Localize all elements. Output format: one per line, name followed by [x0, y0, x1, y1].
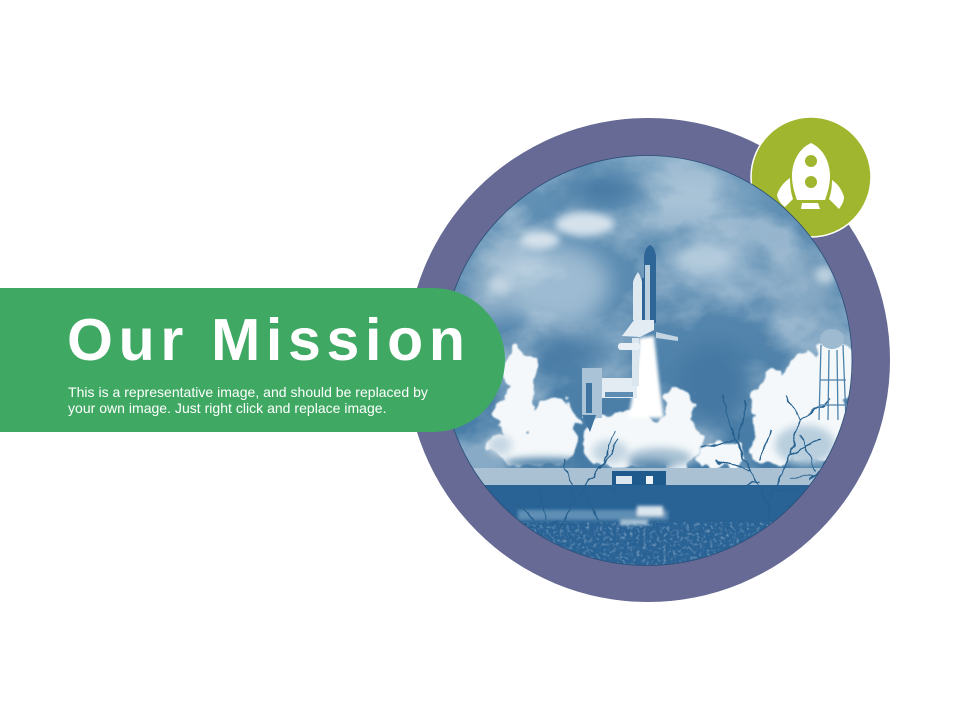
photo edge	[442, 156, 852, 566]
smoke shading	[488, 425, 835, 471]
left fin	[777, 178, 793, 207]
solid rocket booster	[633, 272, 642, 320]
orbiter wing	[622, 320, 654, 337]
water	[518, 506, 668, 525]
purple ring	[406, 118, 890, 602]
ground texture	[523, 522, 772, 566]
sky clouds	[468, 173, 835, 358]
heading: Our Mission	[67, 307, 471, 373]
description	[68, 384, 428, 416]
exhaust smoke	[486, 340, 860, 470]
description: your own image. Just right click and replace image.	[68, 400, 387, 416]
plume	[628, 336, 664, 418]
cloud texture	[456, 156, 852, 468]
bright cloud crest	[488, 212, 835, 294]
foreground strip	[473, 468, 821, 485]
green banner	[0, 288, 505, 432]
external tank	[644, 245, 656, 323]
launch tower	[582, 332, 678, 432]
rocket windows	[805, 155, 817, 188]
icon: rocket badge	[751, 117, 871, 237]
bare tree left	[515, 430, 620, 530]
dark sky patches	[535, 176, 753, 427]
rocket body	[792, 143, 830, 200]
water tower	[819, 329, 846, 420]
description: This is a representative image, and should be replaced by	[68, 384, 428, 400]
circular image group	[417, 118, 890, 602]
photo: shuttle launch	[440, 150, 860, 570]
sky	[454, 156, 851, 468]
right fin	[829, 180, 844, 209]
building	[612, 471, 666, 486]
bare tree right	[700, 395, 830, 485]
ground	[484, 485, 810, 565]
rocket nozzle	[801, 203, 820, 209]
tank highlight	[645, 265, 650, 323]
